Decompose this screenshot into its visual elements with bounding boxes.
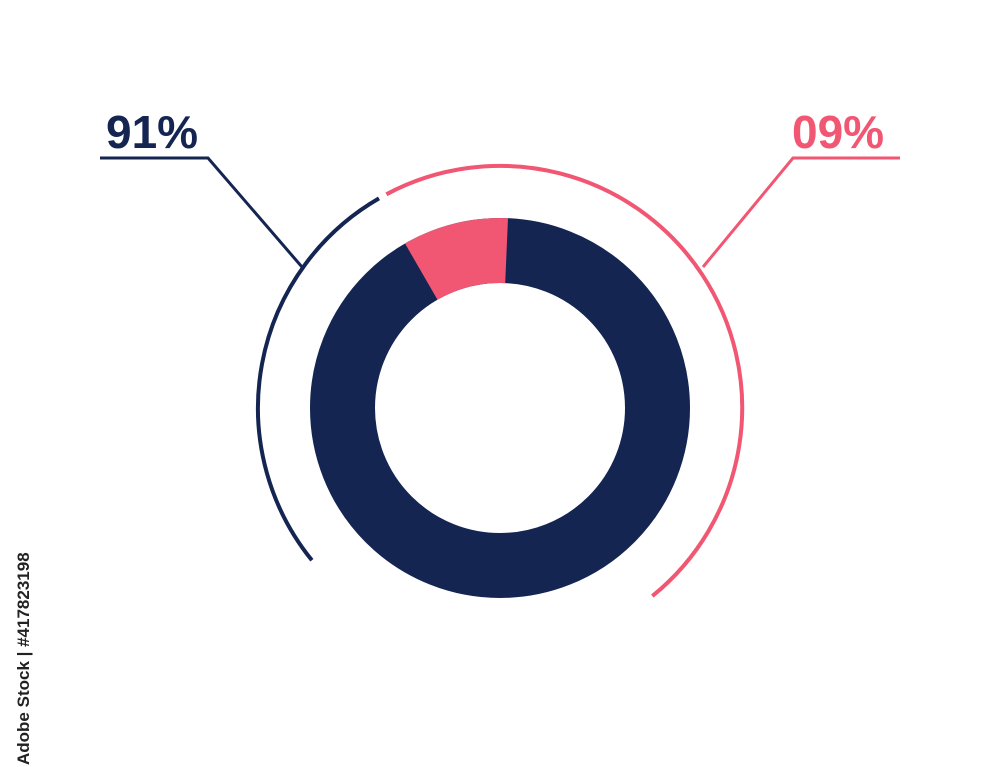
leader line: pink (703, 158, 900, 267)
watermark: stock id: Adobe Stock | #417823198 (14, 552, 33, 765)
leader line: navy (100, 158, 302, 267)
donut: navy 91% ring (342, 218, 658, 565)
label: 09%: 09% (792, 106, 884, 158)
outer arc: pink (386, 166, 742, 596)
outer arc: navy (258, 198, 379, 560)
label: 91%: 91% (106, 106, 198, 158)
donut segment: pink 9% (405, 218, 508, 300)
